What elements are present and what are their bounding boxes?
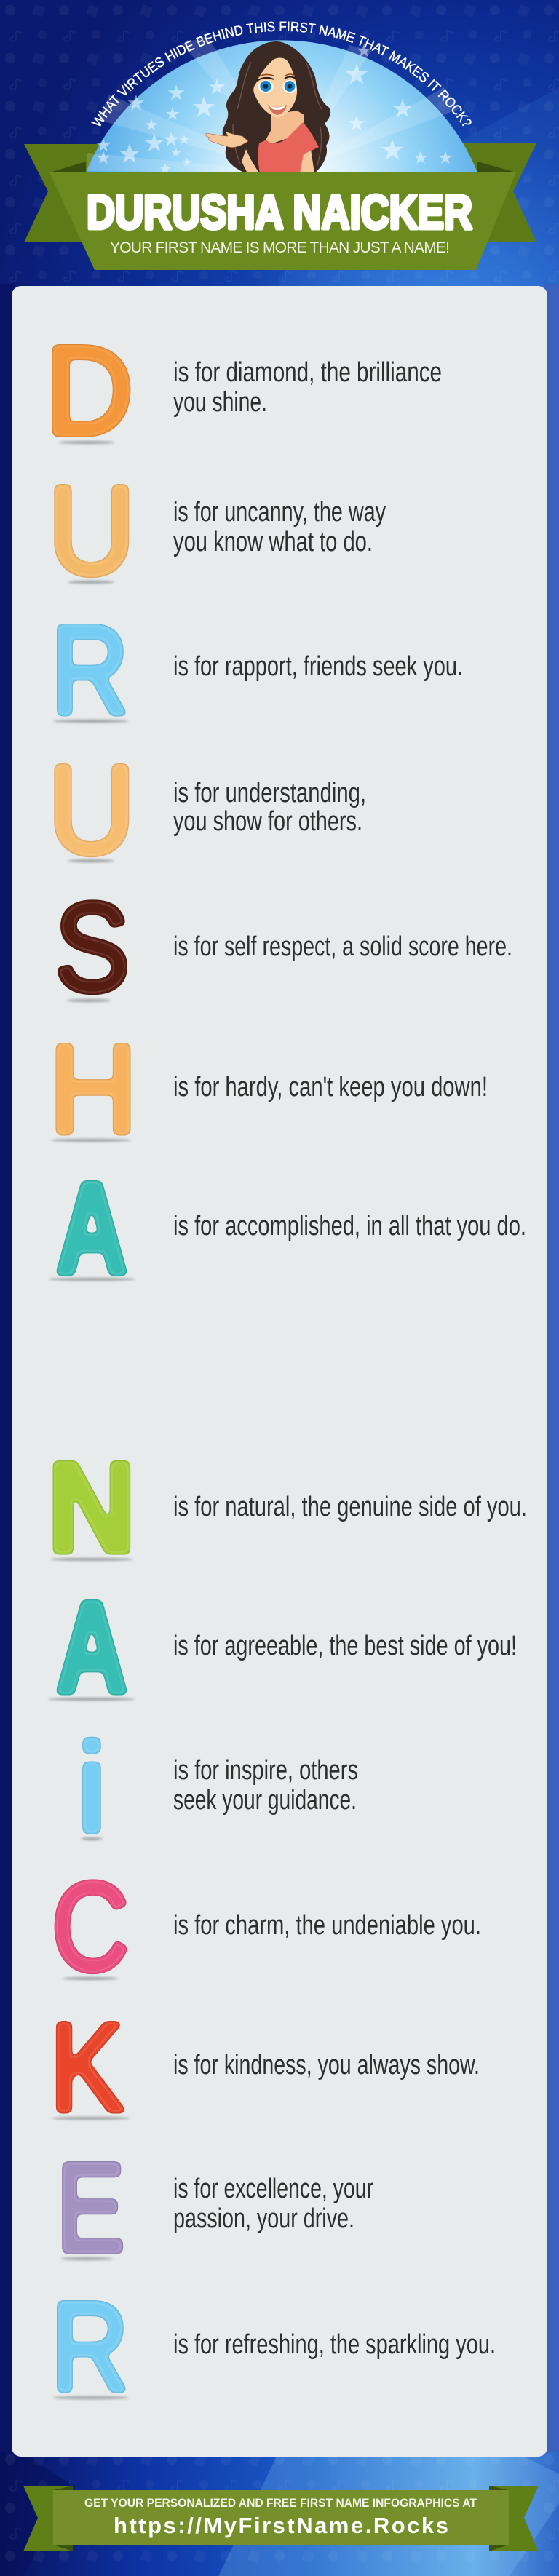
text U: you show for others. — [173, 806, 362, 837]
text I: seek your guidance. — [173, 1785, 357, 1816]
title ribbon — [49, 172, 516, 270]
face — [253, 58, 297, 118]
footer call to action: GET YOUR PERSONALIZED AND FREE FIRST NAME INFOGRAPHICS AT — [84, 2497, 477, 2510]
row: U — [48, 740, 366, 880]
upper arm — [296, 149, 314, 173]
text E — [173, 2174, 373, 2234]
row: H — [49, 1019, 488, 1159]
ribbon tail right — [489, 2486, 539, 2551]
illustration dome with stars — [86, 36, 477, 173]
ribbon front — [53, 2490, 509, 2545]
text D — [173, 357, 442, 418]
text U: is for understanding, — [173, 778, 366, 808]
text U: you know what to do. — [173, 527, 373, 557]
ribbon folds — [49, 162, 516, 172]
text D: you shine. — [173, 387, 267, 418]
mouth — [268, 105, 287, 115]
ribbon tail left — [24, 144, 116, 242]
letter A: A — [56, 1156, 127, 1300]
letter H: H — [49, 1019, 138, 1159]
letter N: N — [47, 1435, 136, 1580]
row: R — [51, 2277, 496, 2417]
letter C: C — [52, 1857, 129, 1997]
character: woman with long brown hair — [206, 41, 330, 173]
background: bottom blue — [0, 2452, 559, 2576]
letter S: S — [55, 878, 130, 1017]
hair strands — [233, 62, 322, 166]
row: S — [55, 878, 512, 1017]
row: A — [48, 1575, 517, 1720]
row: N — [47, 1435, 527, 1580]
eyes — [257, 74, 297, 93]
letter U: U — [48, 461, 135, 600]
row: I — [77, 1718, 358, 1858]
letter R: R — [51, 600, 129, 740]
text R: is for rapport, friends seek you. — [173, 651, 463, 682]
background: top starry blue — [0, 0, 559, 291]
row: C — [52, 1857, 481, 1997]
letter K: K — [49, 1997, 124, 2137]
neck and chest — [265, 111, 304, 144]
lower arm — [242, 149, 259, 173]
stars — [96, 44, 453, 173]
letter R: R — [51, 2277, 129, 2417]
shirt — [258, 122, 319, 173]
text I — [173, 1755, 358, 1816]
text D: is for diamond, the brilliance — [173, 357, 442, 388]
text U: is for uncanny, the way — [173, 497, 386, 528]
subtitle: YOUR FIRST NAME IS MORE THAN JUST A NAME! — [110, 239, 450, 256]
row: A — [48, 1156, 526, 1300]
text E: is for excellence, your — [173, 2174, 373, 2204]
footer url: https://MyFirstName.Rocks — [114, 2513, 448, 2538]
row: U — [48, 461, 386, 600]
ribbon tail right — [451, 143, 536, 242]
text U — [173, 497, 386, 557]
ribbon front — [49, 172, 516, 270]
letter D: D — [45, 321, 133, 461]
hair — [223, 41, 330, 173]
row: D — [45, 321, 442, 461]
footer ribbon — [23, 2486, 539, 2551]
text U — [173, 778, 366, 837]
sun rays — [87, 36, 459, 172]
row: K — [49, 1997, 480, 2137]
name title: DURUSHA NAICKER — [87, 185, 472, 239]
letter i: i — [77, 1718, 106, 1858]
ribbon tail left — [23, 2486, 73, 2551]
letter E: E — [57, 2138, 124, 2278]
curved heading: WHAT VIRTUES HIDE BEHIND THIS FIRST NAME THAT MAKES IT ROCK? — [91, 22, 472, 127]
ribbon folds — [53, 2486, 509, 2551]
text I: is for inspire, others — [173, 1755, 358, 1786]
text E: passion, your drive. — [173, 2203, 354, 2234]
letter A: A — [56, 1575, 127, 1720]
row: E — [57, 2138, 373, 2278]
letter U: U — [48, 740, 135, 880]
row: R — [51, 600, 463, 740]
raised hand — [206, 132, 248, 148]
